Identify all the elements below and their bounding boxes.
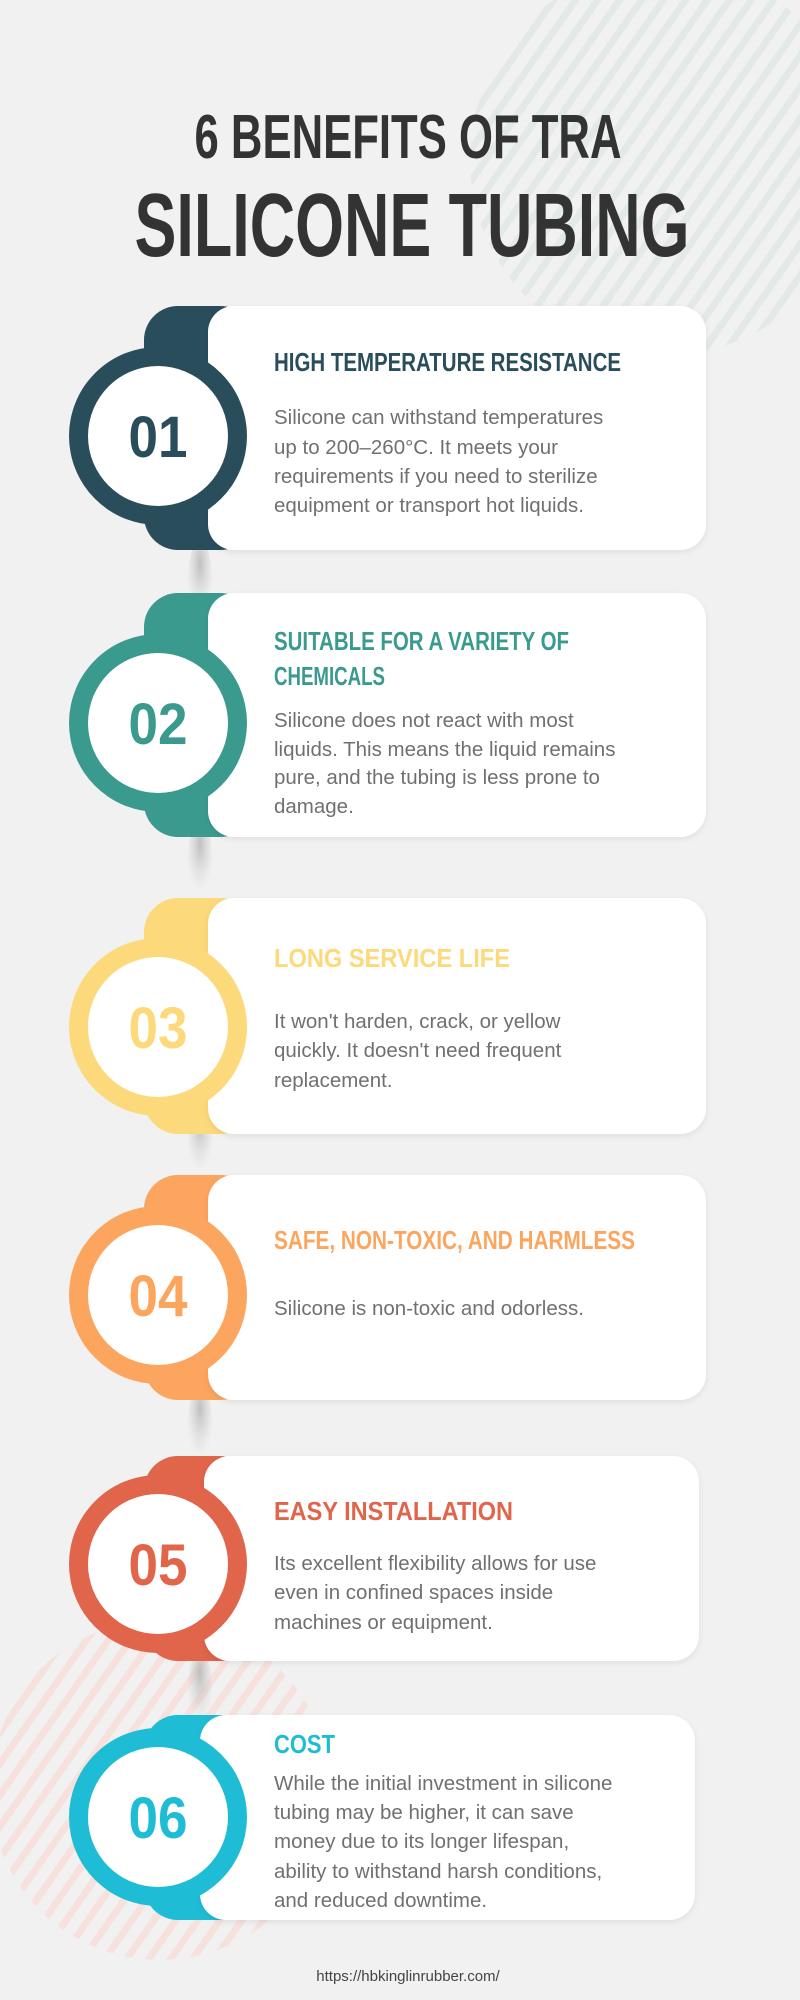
panel: 05 easy installation: Its excellent flexibility allows for use — [274, 1552, 596, 1575]
panel: 05 easy installation: even in confined spaces inside — [274, 1581, 553, 1604]
panel: 04 safe non-toxic: Silicone is non-toxic and odorless. — [274, 1297, 584, 1320]
title: 6 BENEFITS OF TRA — [194, 103, 622, 172]
panel: 01 high temperature resistance: requirements if you need to sterilize — [274, 465, 598, 488]
panel: 06 cost: 06 — [128, 1786, 188, 1851]
title — [134, 103, 690, 276]
panel: 02 chemicals — [69, 593, 706, 837]
panel: 02 chemicals: CHEMICALS — [274, 661, 385, 691]
panel: 06 cost: COST — [274, 1729, 335, 1759]
panel: 03 long service life: LONG SERVICE LIFE — [274, 943, 510, 973]
panel: 05 easy installation: 05 — [128, 1533, 188, 1598]
panel: 05 easy installation: EASY INSTALLATION — [274, 1496, 513, 1526]
panel: 05 easy installation — [69, 1456, 699, 1661]
panel: 01 high temperature resistance: equipment or transport hot liquids. — [274, 494, 584, 517]
decorative striped circle bottom left — [0, 1620, 330, 1960]
panel: 06 cost: money due to its longer lifespan, — [274, 1830, 569, 1853]
panel: 02 chemicals: Silicone does not react with most — [274, 709, 574, 732]
panel: 03 long service life: quickly. It doesn't need frequent — [274, 1039, 562, 1062]
panel: 03 long service life: replacement. — [274, 1069, 393, 1092]
panel: 03 long service life: 03 — [128, 996, 188, 1061]
panel: 01 high temperature resistance: 01 — [128, 405, 188, 470]
panel: 06 cost: tubing may be higher, it can save — [274, 1801, 574, 1824]
panel: 06 cost: ability to withstand harsh conditions, — [274, 1860, 602, 1883]
decorative striped circle top right — [470, 0, 800, 355]
panel: 04 safe non-toxic — [69, 1175, 706, 1400]
panel: 02 chemicals: SUITABLE FOR A VARIETY OF — [274, 626, 569, 656]
panel: 03 long service life — [69, 898, 706, 1134]
footer url: https://hbkinglinrubber.com/ — [316, 1968, 501, 1985]
panel: 06 cost — [69, 1715, 695, 1920]
panel: 02 chemicals: pure, and the tubing is less prone to — [274, 766, 600, 789]
panel: 01 high temperature resistance: Silicone can withstand temperatures — [274, 406, 603, 429]
panel: 02 chemicals: liquids. This means the liquid remains — [274, 738, 615, 761]
panel: 01 high temperature resistance: up to 200–260°C. It meets your — [274, 436, 558, 459]
panel: 01 high temperature resistance — [69, 306, 706, 550]
panel: 06 cost: and reduced downtime. — [274, 1889, 487, 1912]
panel: 02 chemicals: damage. — [274, 795, 354, 818]
panel: 02 chemicals: 02 — [128, 692, 188, 757]
panel: 01 high temperature resistance: HIGH TEMPERATURE RESISTANCE — [274, 347, 621, 377]
panel: 04 safe non-toxic: SAFE, NON-TOXIC, AND HARMLESS — [274, 1225, 635, 1255]
panel: 06 cost: While the initial investment in silicone — [274, 1772, 612, 1795]
panel: 03 long service life: It won't harden, crack, or yellow — [274, 1010, 561, 1033]
panel: 05 easy installation: machines or equipment. — [274, 1611, 493, 1634]
panel: 04 safe non-toxic: 04 — [128, 1264, 188, 1329]
connector shadows — [188, 540, 212, 1730]
